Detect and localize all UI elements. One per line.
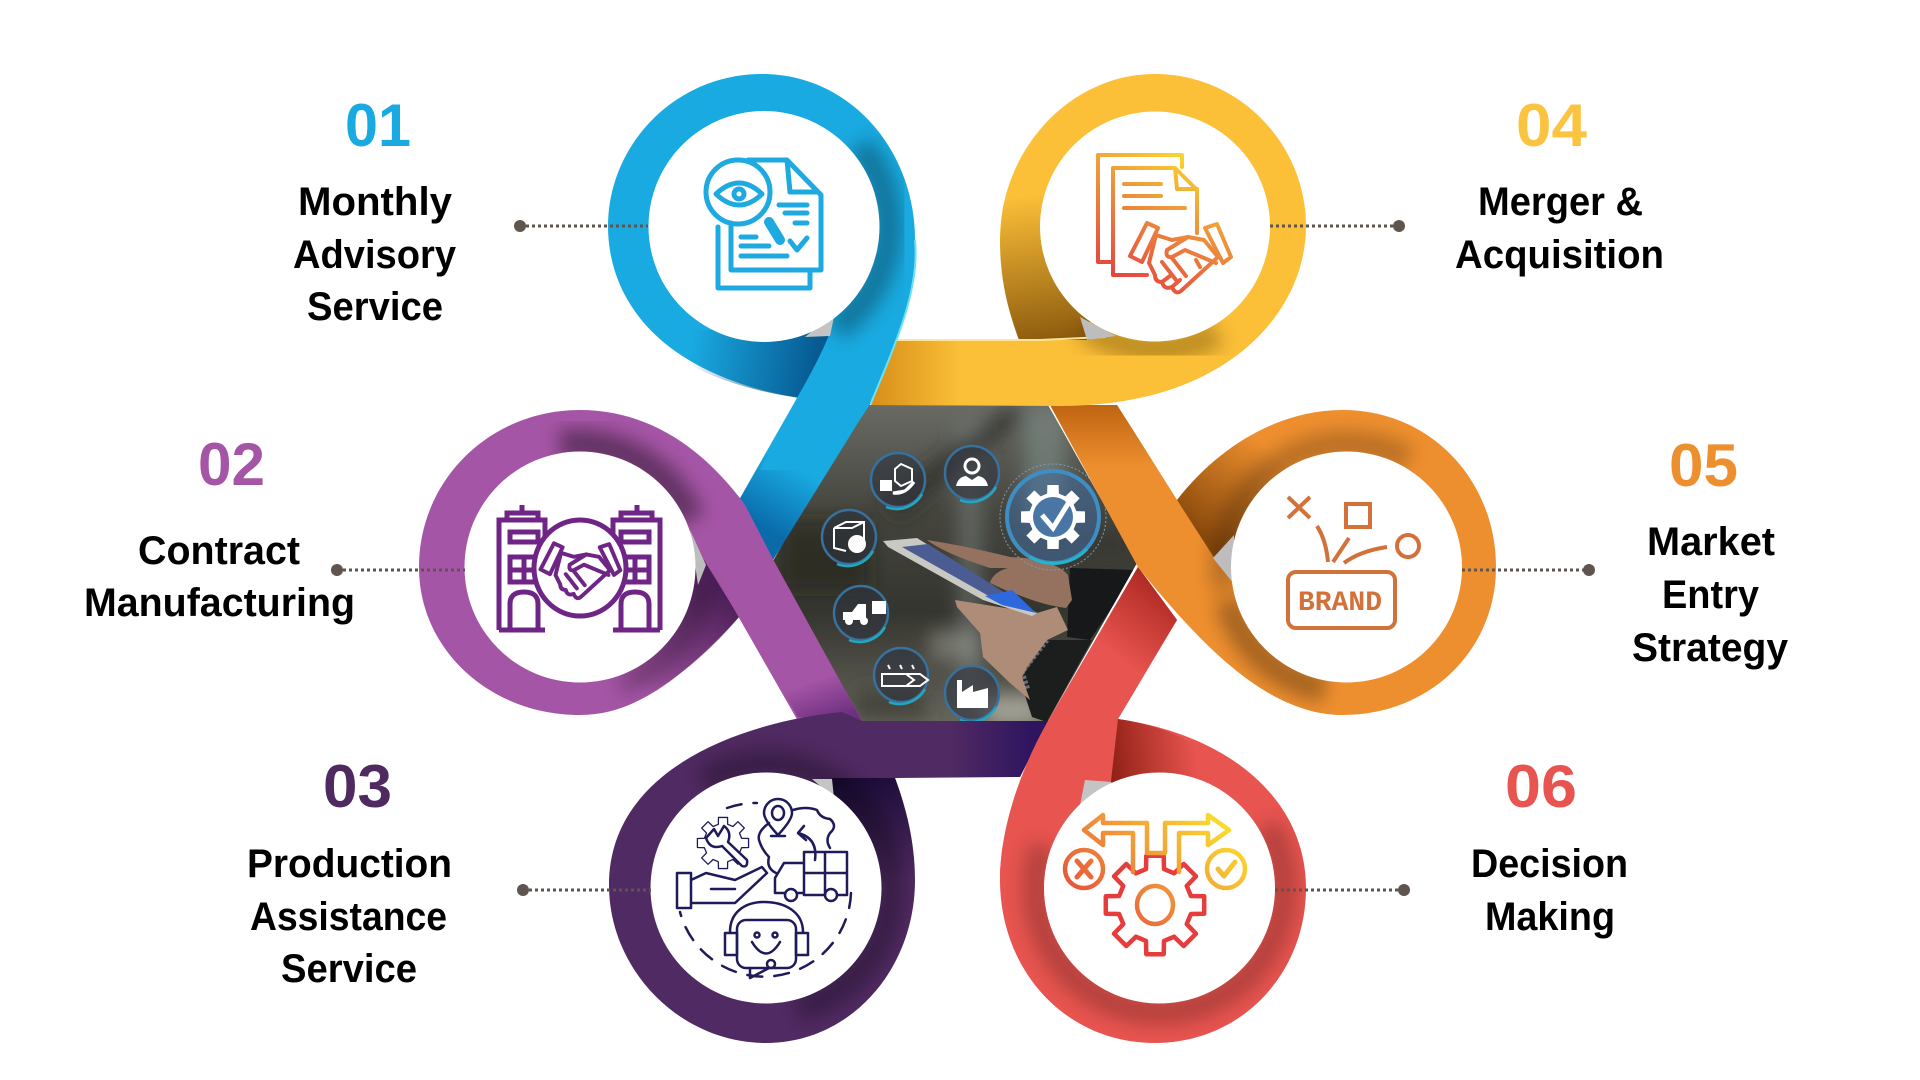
- violet tail shading: [620, 555, 739, 697]
- label 04: Merger & Acquisition: [1455, 92, 1664, 277]
- gap wedge shadow blue: [805, 312, 835, 337]
- label 03: Production Assistance Service: 03: [323, 753, 392, 820]
- ribbon 01 lower strap (blue, passes under violet): [739, 398, 869, 560]
- label 03: Production Assistance Service: Assistance: [250, 895, 447, 939]
- red strap: [1000, 567, 1177, 900]
- gap wedge shadow yellow: [1080, 317, 1116, 340]
- orange strap: [1050, 405, 1343, 715]
- yellow arm shading: [1000, 190, 1090, 340]
- label 05: Market Entry Strategy: [1632, 432, 1789, 670]
- ribbon 03: dark purple loop: [609, 712, 1048, 1043]
- label 03: Production Assistance Service: Production: [247, 842, 452, 886]
- label 05: Market Entry Strategy: Strategy: [1632, 626, 1789, 670]
- conveyor: [882, 665, 928, 686]
- hand: [677, 867, 767, 908]
- ribbon 06: red loop: [1000, 567, 1306, 1043]
- gap wedge shadow red: [1079, 780, 1112, 810]
- dark purple ring and band: [609, 712, 1048, 1043]
- label 05: Market Entry Strategy: Entry: [1662, 573, 1760, 617]
- icon: two buildings with handshake: [499, 505, 660, 630]
- headset agent: [956, 459, 988, 486]
- leader line 02: [331, 564, 465, 576]
- gap wedge shadow violet: [690, 530, 706, 585]
- label 01: Monthly Advisory Service: Service: [307, 285, 443, 329]
- label 05: Market Entry Strategy: 05: [1669, 432, 1738, 499]
- leader line 01: [514, 220, 648, 232]
- icon: brand strategy: [1288, 497, 1419, 628]
- large gear check: [1000, 464, 1106, 570]
- white icon circles: [464, 111, 1462, 1004]
- label 01: Monthly Advisory Service: [293, 92, 457, 329]
- factory: [957, 680, 988, 708]
- icon: document under magnifier with eye: [706, 160, 821, 288]
- forklift: [843, 601, 886, 625]
- ribbon 05: orange loop: [1050, 405, 1496, 715]
- leader line 03: [517, 884, 651, 896]
- icon: production assistance line art: [677, 799, 851, 978]
- icon: documents with handshake: [1098, 155, 1231, 292]
- leader line 04: [1270, 220, 1405, 232]
- label 01: Monthly Advisory Service: Monthly: [298, 180, 453, 224]
- gap wedge shadow orange: [1213, 535, 1234, 584]
- smiling headset face: [737, 920, 796, 968]
- left building: [499, 505, 545, 630]
- gear and wrench: [697, 817, 749, 869]
- label 02: Contract Manufacturing: 02: [198, 431, 265, 498]
- truck with boxes: [775, 852, 847, 895]
- suit sleeves: [1020, 568, 1137, 722]
- ribbon 01: blue loop: [608, 74, 916, 470]
- dashed circle: [680, 803, 851, 977]
- label 01: Monthly Advisory Service: Advisory: [293, 233, 457, 277]
- label 03: Production Assistance Service: [247, 753, 452, 991]
- label 04: Merger & Acquisition: Acquisition: [1455, 233, 1664, 277]
- label 06: Decision Making: [1471, 753, 1628, 939]
- label 04: Merger & Acquisition: Merger &: [1478, 180, 1643, 224]
- icon: gear with decision arrows: [1065, 815, 1245, 954]
- blue strap: [760, 240, 916, 470]
- violet strap: [650, 430, 862, 721]
- label 06: Decision Making: 06: [1505, 753, 1577, 820]
- ribbon 02: violet loop: [419, 410, 862, 721]
- floating circle icons: [822, 446, 1106, 722]
- label 03: Production Assistance Service: Service: [281, 947, 417, 991]
- label 02: Contract Manufacturing: Manufacturing: [84, 581, 355, 625]
- map pin and region: [764, 799, 792, 836]
- orange tail shading: [1177, 410, 1343, 558]
- label 02: Contract Manufacturing: Contract: [138, 529, 300, 573]
- leader line 05: [1462, 564, 1595, 576]
- violet body: [419, 410, 862, 721]
- hands: [927, 540, 1072, 700]
- red tail shading: [1110, 719, 1222, 800]
- blue tail shading: [640, 320, 840, 398]
- label 06: Decision Making: Decision: [1471, 842, 1628, 886]
- leader line 06: [1275, 884, 1410, 896]
- orange body: [1050, 405, 1496, 715]
- icon: brand strategy: BRAND: [1298, 588, 1382, 619]
- central hexagon photo: hands using a tablet with logistics icons: [770, 400, 1140, 725]
- label 04: Merger & Acquisition: 04: [1516, 92, 1588, 159]
- yellow ring and band: [871, 74, 1306, 406]
- tablet: [883, 538, 1037, 616]
- label 01: Monthly Advisory Service: 01: [345, 92, 411, 159]
- box in hand: [880, 464, 914, 493]
- right building: [613, 505, 660, 630]
- package exchange: [834, 522, 865, 552]
- label 06: Decision Making: Making: [1485, 895, 1615, 939]
- ribbon 04: yellow loop: [871, 74, 1306, 406]
- dark purple tail shading: [830, 778, 915, 885]
- label 02: Contract Manufacturing: [84, 431, 355, 625]
- blue ring body: [608, 74, 915, 398]
- gap wedge shadow dark purple: [812, 779, 834, 798]
- label 05: Market Entry Strategy: Market: [1647, 520, 1775, 564]
- red body: [1000, 567, 1306, 1043]
